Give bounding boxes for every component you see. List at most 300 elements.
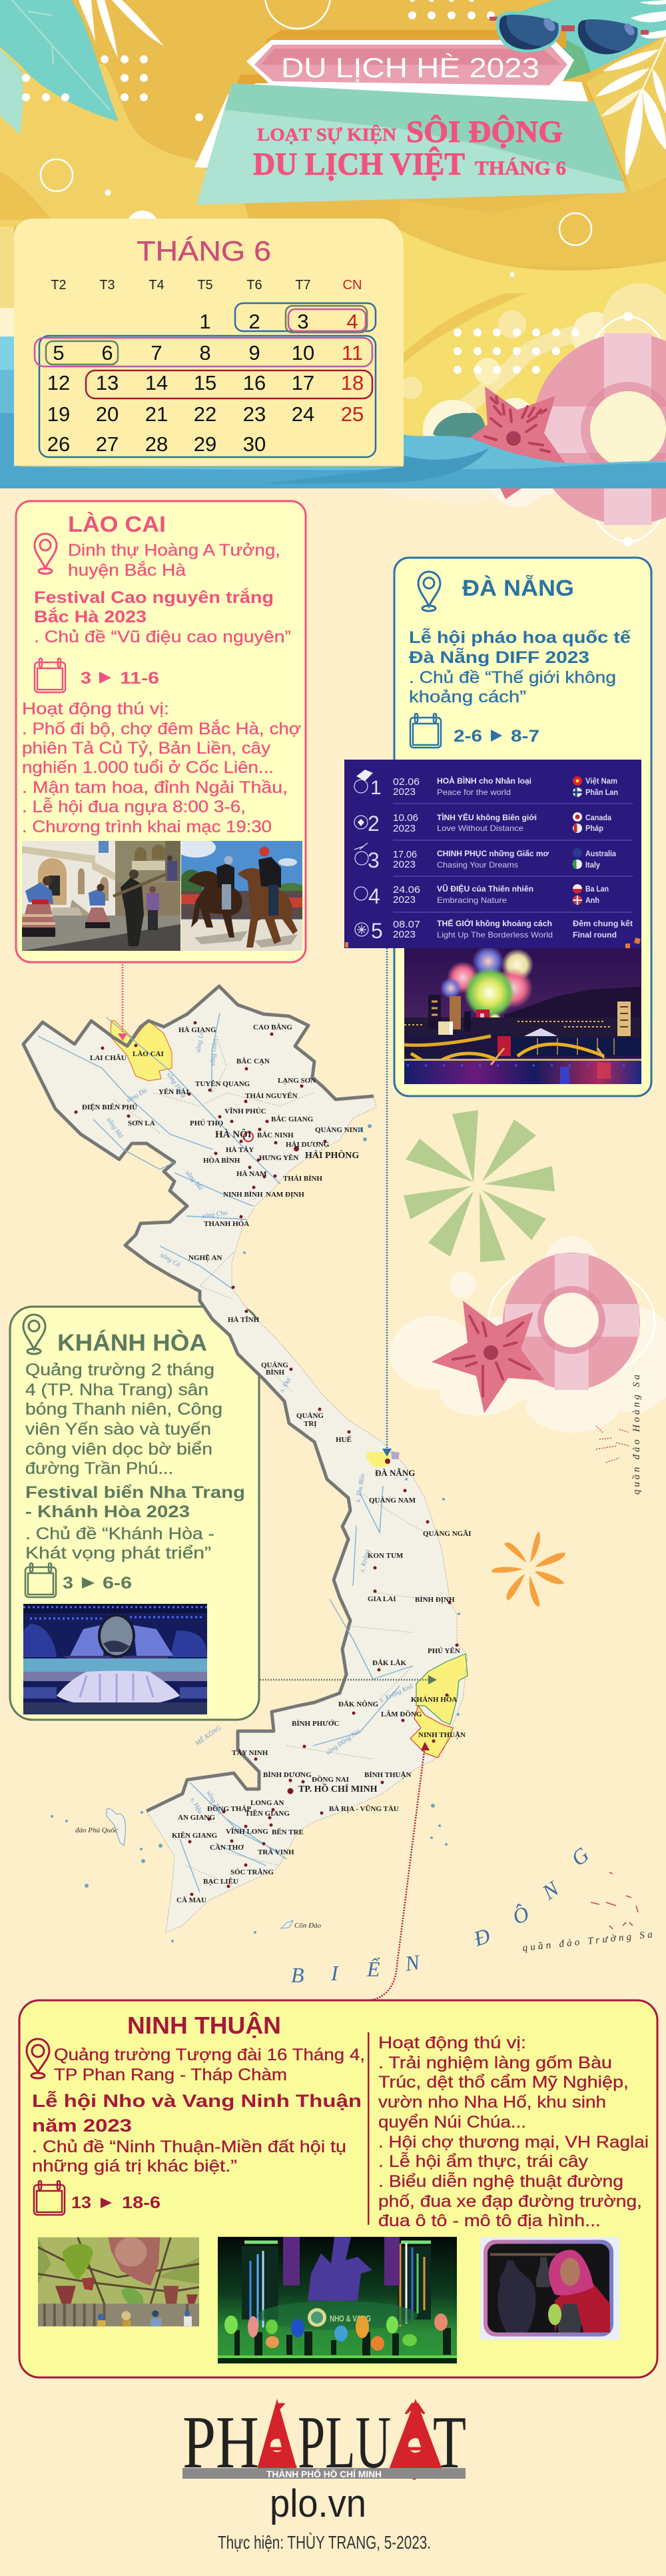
province labels: HƯNG YÊN xyxy=(259,1154,298,1162)
decoration: white dots and rings xyxy=(22,0,591,277)
weekday labels: CN xyxy=(343,278,362,293)
schedule rows: 2023 xyxy=(393,786,416,798)
province labels: BÌNH PHƯỚC xyxy=(292,1720,339,1728)
province labels: QUẢNG NAM xyxy=(369,1497,416,1505)
river labels: sông Lô xyxy=(194,1031,206,1053)
banner: event headline xyxy=(194,83,627,205)
province labels: GIA LAI xyxy=(368,1595,396,1603)
province labels: LONG AN xyxy=(250,1799,284,1807)
photo: hoang a tuong palace xyxy=(22,841,180,951)
province labels: BẮC GIANG xyxy=(271,1115,314,1123)
flags and countries: Đêm chung kết xyxy=(573,919,633,928)
venue text xyxy=(54,2046,365,2084)
river labels: sông Hồng xyxy=(165,1071,188,1099)
schedule rows: CHINH PHỤC những Giấc mơ xyxy=(437,849,549,858)
activities: Hoạt động thú vị: xyxy=(378,2034,526,2052)
river labels: s. Thu Bồn xyxy=(354,1473,366,1503)
festival name xyxy=(25,1483,245,1521)
calendar dates: 29 xyxy=(194,432,216,456)
calendar dates: 15 xyxy=(194,371,216,394)
weekday labels xyxy=(51,278,362,293)
festival name: Festival biển Nha Trang xyxy=(25,1483,245,1502)
river labels: s. Krông xyxy=(358,1549,372,1573)
calendar dates: 19 xyxy=(47,402,70,426)
province labels: ĐÀ NẴNG xyxy=(375,1468,415,1478)
photo: nha trang festival xyxy=(23,1604,207,1714)
province labels: THÁI NGUYÊN xyxy=(245,1092,298,1100)
province labels: LAI CHÂU xyxy=(90,1054,127,1062)
river labels: s. Krông Knô xyxy=(379,1682,414,1704)
river labels: sông Mã xyxy=(105,1116,124,1139)
venue text xyxy=(68,541,280,580)
venue text: công viên dọc bờ biển xyxy=(25,1440,212,1459)
schedule icons and numerals: 2 xyxy=(368,812,380,836)
dates: 3 xyxy=(81,669,91,688)
calendar dates: 3 xyxy=(297,310,309,333)
river labels: sông Đồng Nai xyxy=(324,1728,362,1756)
decoration: clouds under header xyxy=(381,448,563,507)
logo wordmark: PLU xyxy=(298,2401,391,2484)
schedule rows: 10.06 xyxy=(393,812,418,824)
photo: festival stage xyxy=(218,2237,457,2363)
arrow: da nang xyxy=(382,943,392,1457)
dates xyxy=(71,2194,161,2212)
province labels: ĐỒNG THÁP xyxy=(207,1804,251,1813)
calendar dates: 1 xyxy=(199,310,211,333)
schedule rows: Chasing Your Dreams xyxy=(437,860,518,870)
schedule rows: THẾ GIỚI không khoảng cách xyxy=(437,918,552,928)
province labels: QUẢNG NINH xyxy=(315,1126,364,1134)
province labels: KON TUM xyxy=(368,1552,404,1560)
label: bien dong sea: N xyxy=(537,1876,564,1904)
icon: sunglasses xyxy=(490,11,649,57)
theme: khoảng cách” xyxy=(409,688,526,706)
decoration: shell and foam xyxy=(423,398,533,460)
province labels: BẮC NINH xyxy=(257,1131,294,1139)
festival name xyxy=(34,587,274,626)
dates: 13 xyxy=(71,2194,91,2212)
activities: đua ô tô - mô tô địa hình... xyxy=(378,2212,601,2230)
logo wordmark: T xyxy=(433,2401,466,2484)
panel: khanh hoa xyxy=(10,1307,259,1720)
province labels: LÀO CAI xyxy=(133,1050,164,1058)
activities: . Biểu diễn nghệ thuật đường xyxy=(378,2172,623,2191)
festival name: năm 2023 xyxy=(32,2116,132,2136)
province labels: BẮC CẠN xyxy=(236,1057,270,1065)
photo: festival stage: NHO & VANG xyxy=(330,2313,371,2323)
venue text: huyện Bắc Hà xyxy=(68,560,186,580)
banner: event headline: THÁNG 6 xyxy=(475,157,566,179)
province labels xyxy=(82,1023,471,1904)
activities: Trúc, dệt thổ cẩm Mỹ Nghiệp, xyxy=(378,2073,629,2092)
theme: . Chủ đề “Ninh Thuận-Miền đất hội tụ xyxy=(32,2138,346,2156)
province dots xyxy=(75,1021,458,1896)
heading: NINH THUẬN xyxy=(127,2011,281,2039)
province labels: HÀ NAM xyxy=(236,1170,267,1178)
calendar dates: 25 xyxy=(341,402,364,426)
calendar dates xyxy=(47,310,364,456)
calendar dates: 9 xyxy=(248,341,260,364)
icon: calendar xyxy=(25,1563,56,1597)
photo: cham pottery artisan xyxy=(480,2238,619,2340)
flags and countries: Pháp xyxy=(585,824,603,833)
activities: nghiến 1.000 tuổi ở Cốc Liên... xyxy=(22,758,274,777)
logo: phap luat xyxy=(182,2399,466,2484)
decoration: clouds right xyxy=(390,1236,666,1433)
label: bien dong sea xyxy=(291,1842,593,1987)
theme: . Chủ đề “Khánh Hòa - xyxy=(25,1525,214,1543)
river labels: sông Gâm xyxy=(209,1039,219,1066)
theme xyxy=(32,2138,346,2176)
river labels: sông Chu xyxy=(202,1209,228,1220)
dates: 6-6 xyxy=(103,1574,132,1593)
venue text: TP Phan Rang - Tháp Chàm xyxy=(54,2066,287,2084)
province labels: THANH HÓA xyxy=(204,1220,249,1228)
decoration: starfish header xyxy=(458,386,567,499)
calendar dates: 10 xyxy=(292,341,314,364)
province labels: AN GIANG xyxy=(178,1814,215,1822)
venue text xyxy=(25,1361,222,1478)
flags and countries: Anh xyxy=(585,896,599,905)
schedule rows: 2023 xyxy=(393,859,416,870)
activities: phố, đua xe đạp đường trường, xyxy=(378,2192,642,2211)
river labels: sông Mã xyxy=(184,1169,204,1192)
calendar dates: 8 xyxy=(199,341,211,364)
theme: Khát vọng phát triển” xyxy=(25,1544,211,1563)
panel: da nang xyxy=(394,558,651,1096)
province labels: NINH BÌNH xyxy=(223,1191,263,1199)
icon: calendar xyxy=(35,658,65,692)
island labels: đảo Phú Quốc xyxy=(75,1826,118,1834)
province labels: TRỊ xyxy=(304,1420,317,1428)
province labels: TRÀ VINH xyxy=(258,1848,294,1856)
dates xyxy=(63,1574,132,1593)
calendar dates: 21 xyxy=(145,402,168,426)
decoration: palm leaves left xyxy=(0,0,164,135)
decoration: green sunburst xyxy=(404,1110,555,1262)
islands xyxy=(51,1124,460,1942)
activities xyxy=(22,700,301,836)
province labels: YÊN BÁI xyxy=(159,1088,189,1096)
weekday labels: T6 xyxy=(246,278,262,293)
province labels: ĐẮK NÔNG xyxy=(338,1700,379,1708)
label: bien dong sea: Ể xyxy=(366,1957,380,1981)
province labels: SƠN LA xyxy=(128,1119,155,1127)
logo red letter marks xyxy=(257,2399,442,2469)
province labels: HÒA BÌNH xyxy=(203,1157,240,1165)
province labels: TIỀN GIANG xyxy=(245,1809,290,1818)
schedule rows: Embracing Nature xyxy=(437,896,507,905)
activities: Hoạt động thú vị: xyxy=(22,700,169,718)
schedule rows: 02.06 xyxy=(393,776,420,788)
decoration: right palm leaves xyxy=(521,0,666,193)
calendar dates: 2 xyxy=(248,310,260,333)
banner: event headline: DU LỊCH VIỆT xyxy=(253,146,465,182)
province labels: QUẢNG NGÃI xyxy=(423,1530,471,1538)
label: bien dong sea: G xyxy=(566,1842,593,1870)
label: hoang sa islands xyxy=(596,1372,642,1495)
decoration: life ring header xyxy=(532,312,666,546)
province labels: PHÚ YÊN xyxy=(428,1647,460,1655)
activities xyxy=(378,2034,649,2230)
dates xyxy=(81,669,159,688)
province labels: BẠC LIÊU xyxy=(203,1878,238,1886)
flags and countries: Australia xyxy=(585,849,616,858)
river labels: s. Hậu xyxy=(188,1796,204,1815)
province labels: CẦN THƠ xyxy=(210,1843,244,1852)
province labels: HÀ NỘI xyxy=(215,1129,252,1140)
calendar dates: 4 xyxy=(346,310,358,333)
banner: du lich he 2023: DU LỊCH HÈ 2023 xyxy=(281,52,539,83)
panel: ninh thuan xyxy=(19,2000,657,2377)
venue text: Quảng trường 2 tháng xyxy=(25,1361,214,1379)
label: hoang sa islands: quần đảo Hoàng Sa xyxy=(631,1372,642,1495)
schedule rows: 2023 xyxy=(393,894,416,906)
photo: horse racing xyxy=(181,841,302,951)
label: bien dong sea: Đ xyxy=(470,1923,493,1951)
festival name: Đà Nẵng DIFF 2023 xyxy=(409,647,589,667)
province labels: BÌNH THUẬN xyxy=(364,1770,411,1779)
venue text: Dinh thự Hoàng A Tưởng, xyxy=(68,541,280,560)
coastline xyxy=(147,1096,468,1932)
decoration: life ring lower xyxy=(488,1253,655,1390)
venue text: viên Yến sào và tuyến xyxy=(25,1420,211,1439)
weekday labels: T4 xyxy=(149,278,165,293)
dates xyxy=(454,727,539,746)
calendar dates: 27 xyxy=(96,432,119,456)
province labels: BẾN TRE xyxy=(272,1828,304,1836)
venue text: đường Trần Phú... xyxy=(25,1459,173,1478)
banner: event headline: LOẠT SỰ KIỆN xyxy=(257,125,397,145)
icon: calendar xyxy=(410,714,441,748)
festival name: - Khánh Hòa 2023 xyxy=(25,1503,190,1521)
flags and countries xyxy=(573,776,633,940)
schedule icons and numerals: 4 xyxy=(368,884,380,908)
logo wordmark: Á xyxy=(257,2401,297,2484)
venue text: Quảng trường Tượng đài 16 Tháng 4, xyxy=(54,2046,365,2064)
dates: 3 xyxy=(63,1574,73,1593)
activities: phiên Tả Củ Tỷ, Bản Liền, cây xyxy=(22,739,271,758)
calendar dates: 14 xyxy=(145,371,168,394)
decoration: orange flower xyxy=(492,1531,565,1607)
label: bien dong sea: N xyxy=(403,1950,422,1976)
province labels: BÀ RỊA - VŨNG TÀU xyxy=(329,1805,399,1813)
label: truong sa islands xyxy=(522,1872,653,1954)
banner: event headline: SÔI ĐỘNG xyxy=(406,115,563,149)
theme xyxy=(409,668,616,706)
logo wordmark: PH xyxy=(182,2401,259,2484)
calendar dates: 22 xyxy=(194,402,216,426)
province labels: TUYÊN QUANG xyxy=(195,1080,250,1088)
province labels: LẠNG SƠN xyxy=(278,1077,316,1085)
river labels: s. Đại xyxy=(278,1376,293,1394)
calendar dates: 13 xyxy=(96,371,119,394)
province labels: PHÚ THỌ xyxy=(190,1119,224,1127)
panel: festival schedule xyxy=(344,760,641,948)
river labels: MÊ KÔNG xyxy=(193,1724,222,1748)
schedule icons and numerals: 3 xyxy=(368,848,380,872)
logo wordmark: Ậ xyxy=(393,2401,438,2484)
festival name: Lễ hội Nho và Vang Ninh Thuận xyxy=(32,2090,362,2111)
schedule rows: VŨ ĐIỆU của Thiên nhiên xyxy=(437,884,533,894)
calendar dates: 28 xyxy=(145,432,168,456)
province labels: HẢI DƯƠNG xyxy=(286,1141,330,1149)
schedule rows: Love Without Distance xyxy=(437,824,523,833)
icon: calendar xyxy=(34,2181,65,2215)
website: plo.vn xyxy=(270,2482,366,2525)
dates: 11-6 xyxy=(120,669,159,688)
panel: lao cai xyxy=(16,501,308,962)
province labels: BÌNH ĐỊNH xyxy=(415,1596,455,1604)
decoration: white dots right xyxy=(454,328,579,374)
calendar dates: 30 xyxy=(243,432,266,456)
heading: ĐÀ NẴNG xyxy=(462,576,574,601)
map of Vietnam xyxy=(23,986,471,1932)
highlighted provinces xyxy=(111,1021,468,1758)
flags and countries: Italy xyxy=(585,860,600,870)
weekday labels: T2 xyxy=(51,278,67,293)
theme: những giá trị khác biệt.” xyxy=(32,2157,237,2176)
heading: KHÁNH HÒA xyxy=(57,1329,207,1356)
decoration: sea waves xyxy=(0,336,666,488)
theme: . Chủ đề “Vũ điệu cao nguyên” xyxy=(34,628,291,646)
activities: . Lễ hội ẩm thực, trái cây xyxy=(378,2152,589,2171)
province labels: VĨNH PHÚC xyxy=(224,1107,266,1115)
province labels: TP. HỒ CHÍ MINH xyxy=(298,1782,378,1794)
activities: . Mận tam hoa, đỉnh Ngải Thầu, xyxy=(22,778,288,797)
date range highlights xyxy=(35,303,376,457)
flags and countries: Phần Lan xyxy=(585,788,618,797)
activities: vườn nho Nha Hố, khu sinh xyxy=(378,2093,606,2112)
festival name xyxy=(409,627,631,667)
schedule icons and numerals: 5 xyxy=(371,919,383,943)
province labels: SÓC TRĂNG xyxy=(230,1868,274,1876)
province labels: KIÊN GIANG xyxy=(172,1832,218,1840)
flags and countries: Canada xyxy=(585,813,611,822)
river labels: sông Cả xyxy=(159,1251,182,1269)
province labels: KHÁNH HÒA xyxy=(411,1696,457,1704)
province labels: BÌNH DƯƠNG xyxy=(263,1771,312,1779)
heading: LÀO CAI xyxy=(68,512,166,536)
calendar dates: 11 xyxy=(342,341,363,364)
province labels: ĐỒNG NAI xyxy=(312,1775,349,1784)
banner: du lich he 2023 xyxy=(228,30,588,101)
province labels: CAO BẰNG xyxy=(253,1023,292,1031)
schedule rows: Peace for the world xyxy=(437,788,511,797)
activities: quyển Núi Chúa... xyxy=(378,2113,526,2132)
weekday labels: T7 xyxy=(295,278,311,293)
calendar dates: 23 xyxy=(243,402,266,426)
dates: 8-7 xyxy=(511,727,539,746)
province labels: VĨNH LONG xyxy=(226,1828,268,1836)
activities: . Lễ hội đua ngựa 8:00 3-6, xyxy=(22,797,246,816)
schedule rows: 2023 xyxy=(393,929,416,940)
label: bien dong sea: Ô xyxy=(509,1901,533,1929)
province labels: TÂY NINH xyxy=(232,1749,268,1757)
activities: . Chương trình khai mạc 19:30 xyxy=(22,818,272,836)
schedule rows: HOÀ BÌNH cho Nhân loại xyxy=(437,776,531,786)
decoration: starfish lower xyxy=(432,1301,545,1413)
festival name: Bắc Hà 2023 xyxy=(34,606,147,626)
photo: grapes xyxy=(38,2237,199,2327)
activities: . Phố đi bộ, chợ đêm Bắc Hà, chợ xyxy=(22,719,301,738)
river labels: sông Đà xyxy=(125,1087,149,1105)
icon: location pin xyxy=(35,534,57,574)
calendar dates: 7 xyxy=(151,341,163,364)
weekday labels: T5 xyxy=(197,278,213,293)
calendar dates: 16 xyxy=(243,371,266,394)
schedule icons and numerals: 1 xyxy=(370,777,382,799)
rivers xyxy=(38,1013,413,1892)
arrow: lao cai xyxy=(118,964,127,1041)
label: bien dong sea: B xyxy=(291,1963,304,1987)
province labels: NINH THUẬN xyxy=(418,1730,466,1739)
theme xyxy=(25,1525,214,1563)
schedule rows: 2023 xyxy=(393,823,416,834)
schedule rows: TÌNH YÊU không Biên giới xyxy=(437,812,537,822)
theme: . Chủ đề “Thế giới không xyxy=(409,668,616,687)
calendar dates: 24 xyxy=(292,402,314,426)
schedule rows: 17.06 xyxy=(393,849,417,860)
logo wordmark xyxy=(182,2401,466,2484)
dates: 2-6 xyxy=(454,727,482,746)
flags and countries: Ba Lan xyxy=(585,884,609,894)
province labels: BÌNH xyxy=(266,1369,285,1377)
activities: . Trải nghiệm làng gốm Bàu xyxy=(378,2054,612,2072)
flags and countries: Final round xyxy=(573,930,617,940)
dates: 18-6 xyxy=(122,2194,161,2212)
province labels: HÀ GIANG xyxy=(178,1026,216,1034)
icon: location pin xyxy=(23,1315,45,1354)
province labels: ĐIỆN BIÊN PHỦ xyxy=(82,1103,137,1111)
river labels xyxy=(105,1031,414,1816)
province labels: LÂM ĐỒNG xyxy=(381,1710,422,1718)
weekday labels: T3 xyxy=(99,278,115,293)
province labels: NAM ĐỊNH xyxy=(266,1191,304,1199)
province labels: NGHỆ AN xyxy=(188,1253,222,1262)
borders xyxy=(23,986,374,1811)
schedule rows: 08.07 xyxy=(393,919,420,930)
province labels: CÀ MAU xyxy=(176,1896,206,1904)
schedule rows xyxy=(393,776,553,940)
schedule rows: Light Up The Borderless World xyxy=(437,930,553,940)
festival name xyxy=(32,2090,362,2136)
flags and countries: Việt Nam xyxy=(585,776,617,786)
venue text: 4 (TP. Nha Trang) sân xyxy=(25,1381,208,1399)
logo: phap luat: THÀNH PHỐ HỒ CHÍ MINH xyxy=(266,2469,382,2479)
calendar title: THÁNG 6 xyxy=(137,235,271,267)
island labels xyxy=(75,1826,322,1930)
label: truong sa islands: quần đảo Trường Sa xyxy=(522,1930,653,1954)
background: header beach scene xyxy=(0,0,666,488)
province labels: QUẢNG xyxy=(261,1361,288,1369)
calendar dates: 17 xyxy=(292,371,314,394)
province labels: QUẢNG xyxy=(296,1412,324,1420)
calendar dates: 26 xyxy=(47,432,70,456)
calendar dates: 20 xyxy=(96,402,119,426)
calendar dates: 6 xyxy=(101,341,113,364)
province labels: HÀ TÂY xyxy=(226,1146,254,1154)
icon: location pin xyxy=(418,572,440,611)
province labels: HUẾ xyxy=(336,1435,352,1444)
river labels: sông Tiền xyxy=(204,1790,224,1816)
calendar dates: 18 xyxy=(341,371,364,394)
land fill xyxy=(23,986,468,1932)
photo: fireworks over da nang xyxy=(404,948,641,1084)
calendar dates: 5 xyxy=(53,341,65,364)
province boundaries xyxy=(113,1026,426,1886)
schedule icons and numerals xyxy=(354,770,383,943)
